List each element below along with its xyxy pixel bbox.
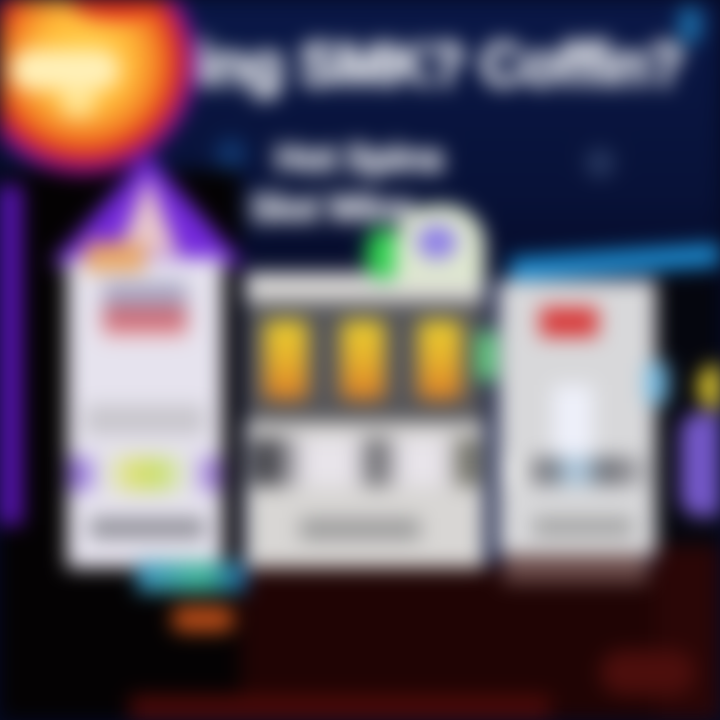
machine 2 blue lamp [417, 225, 457, 259]
right floor [655, 545, 720, 720]
machine 2 [228, 188, 512, 585]
floor logo mark [600, 650, 695, 695]
machine 2 top dome [395, 205, 485, 285]
machine 3 side accent [646, 363, 668, 403]
fireball lower highlight [60, 88, 96, 118]
machine 3 button row [503, 457, 648, 485]
reel two [341, 320, 385, 400]
machine 1 badge [103, 282, 187, 342]
machine 1 button row [70, 457, 220, 491]
machine 3 red sign [540, 307, 598, 337]
machine 2 body [245, 272, 485, 568]
machine 1 purple crown [50, 155, 245, 265]
neon strip [510, 242, 720, 280]
machine 1 body [67, 258, 223, 568]
sky spark top right [678, 5, 702, 45]
sky spark right [585, 148, 615, 178]
machine 3 [481, 263, 684, 595]
background: dark floor [230, 565, 720, 720]
reel three [418, 320, 462, 400]
title: ing SMK? Coffin? [196, 31, 683, 98]
reel one [264, 320, 308, 400]
machine 2 tray [300, 518, 420, 540]
machine 1 tray [90, 518, 205, 538]
machine 2 lower panel [250, 438, 480, 486]
machine 3 body [498, 280, 656, 555]
machine 3 display [553, 385, 593, 465]
machine 3 tray [533, 517, 633, 537]
background: starry night sky [180, 0, 720, 280]
right machine yellow lamp [698, 364, 720, 410]
machine 1 reels panel [85, 405, 205, 435]
background: black left column [0, 170, 240, 720]
subtitle line one: Hot Spins [275, 138, 443, 180]
sky spark left [215, 138, 247, 170]
machine 2 side accent [477, 332, 495, 380]
orange floor lamp [172, 606, 234, 632]
background: black right edge [655, 275, 720, 545]
machine 2 green lamp [365, 228, 403, 280]
purple pillar [0, 185, 22, 525]
fireball [0, 0, 196, 174]
machine 2 reel frame [245, 302, 487, 422]
machine 1 top lamp [85, 242, 145, 272]
fireball highlight [10, 50, 120, 90]
machine 1 [42, 146, 262, 608]
fireball red flare [70, 0, 160, 20]
machine 1 base lights [137, 562, 247, 592]
machine 1 crown tip [117, 175, 179, 255]
subtitle line two: Slot Wins [250, 188, 414, 230]
floor glow [130, 695, 550, 720]
right machine purple [680, 412, 720, 517]
machine 3 base [503, 555, 648, 583]
